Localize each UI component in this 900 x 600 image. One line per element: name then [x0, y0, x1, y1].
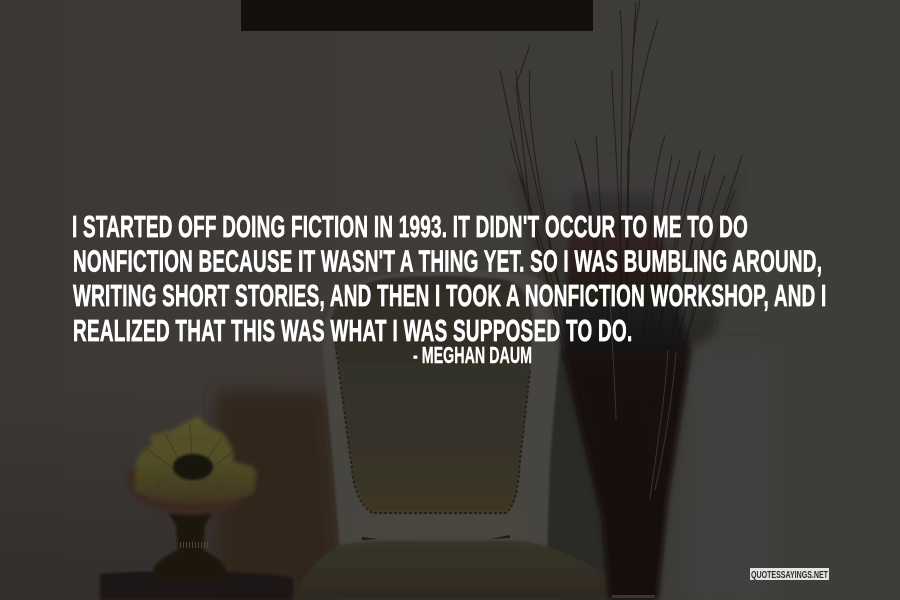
flower petals	[134, 416, 256, 504]
petal creases	[146, 424, 232, 506]
grey fan haze	[540, 170, 730, 350]
line 2: NONFICTION BECAUSE IT WASN'T A THING YET. SO I WAS BUMBLING AROUND,	[73, 245, 822, 279]
chair seat rail	[358, 518, 522, 538]
picture frame	[241, 0, 593, 31]
chair frame	[322, 270, 563, 548]
lower wall shade	[0, 380, 300, 600]
watermark	[750, 568, 829, 581]
chair back cushion	[332, 276, 533, 512]
table	[100, 571, 293, 600]
vase foot	[153, 512, 226, 578]
vase stripes	[180, 542, 208, 548]
attribution: - MEGHAN DAUM	[413, 344, 532, 369]
dark niche right of chair	[545, 350, 612, 600]
quote text	[72, 211, 826, 348]
vase bowl	[126, 470, 258, 515]
line 4: REALIZED THAT THIS WAS WHAT I WAS SUPPOSED TO DO.	[73, 315, 632, 348]
line 1: I STARTED OFF DOING FICTION IN 1993. IT DIDN'T OCCUR TO ME TO DO	[72, 211, 748, 244]
twig bundle dark core	[563, 190, 690, 600]
fine stalks	[500, 0, 742, 520]
line 3: WRITING SHORT STORIES, AND THEN I TOOK A NONFICTION WORKSHOP, AND I	[73, 280, 826, 313]
pale petal band	[186, 479, 250, 483]
flower centre	[173, 454, 213, 480]
right wall band	[690, 350, 775, 600]
flower vase	[126, 416, 258, 578]
twig bundle	[507, 170, 743, 600]
chair seat slits	[362, 535, 510, 540]
chair seat	[296, 541, 612, 600]
vase band	[612, 595, 655, 598]
curtain shadow	[215, 390, 345, 600]
chair	[296, 270, 612, 600]
pale stalks	[610, 300, 676, 500]
watermark: QUOTESSAYINGS.NET	[751, 569, 828, 581]
chair piping	[332, 317, 530, 513]
